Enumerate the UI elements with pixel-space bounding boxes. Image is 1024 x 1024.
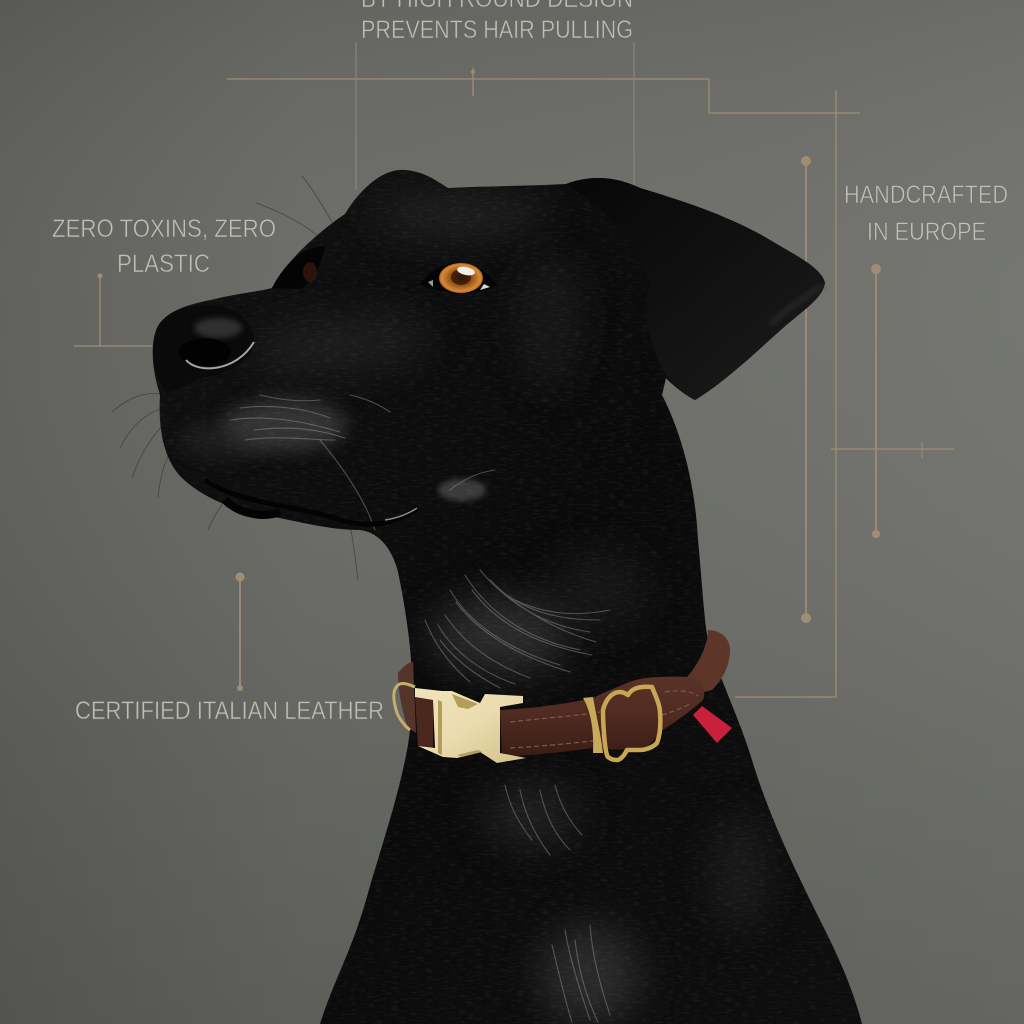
buckle details bbox=[438, 694, 482, 757]
text: handcrafted in europe bbox=[844, 181, 1008, 246]
text: handcrafted in europe: IN EUROPE bbox=[867, 218, 986, 246]
slider bar bbox=[583, 697, 603, 753]
near eye bbox=[420, 263, 497, 293]
far eye glint bbox=[303, 262, 317, 282]
red tag bbox=[693, 706, 732, 743]
far eye bbox=[272, 246, 325, 289]
fur shading bbox=[140, 160, 870, 1024]
collar bbox=[394, 630, 732, 763]
back strap bbox=[687, 630, 730, 693]
left d-ring bbox=[394, 684, 415, 730]
ear bbox=[566, 178, 825, 400]
neck fur strands bbox=[230, 395, 610, 1022]
mouth line bbox=[205, 480, 418, 524]
text: zero toxins zero plastic: PLASTIC bbox=[117, 250, 210, 278]
dog silhouette bbox=[153, 170, 862, 1024]
gold rectangular ring bbox=[603, 687, 660, 760]
buckle bbox=[415, 688, 526, 763]
heading text: prevents hair pulling: PREVENTS HAIR PULLING bbox=[361, 16, 633, 44]
text: zero toxins zero plastic: ZERO TOXINS, ZERO bbox=[52, 215, 276, 243]
left strap behind buckle bbox=[398, 662, 416, 733]
ear fold highlight bbox=[770, 285, 822, 325]
dog portrait bbox=[112, 160, 870, 1024]
text: certified italian leather: CERTIFIED ITALIAN LEATHER bbox=[75, 697, 384, 725]
nose bbox=[153, 305, 254, 392]
inner strap by buckle bbox=[415, 697, 433, 748]
annotation line network bbox=[74, 42, 954, 697]
text: zero toxins zero plastic bbox=[52, 215, 276, 278]
strap leather bbox=[500, 677, 704, 757]
whiskers bbox=[112, 176, 358, 580]
strap stitching bbox=[510, 691, 698, 748]
